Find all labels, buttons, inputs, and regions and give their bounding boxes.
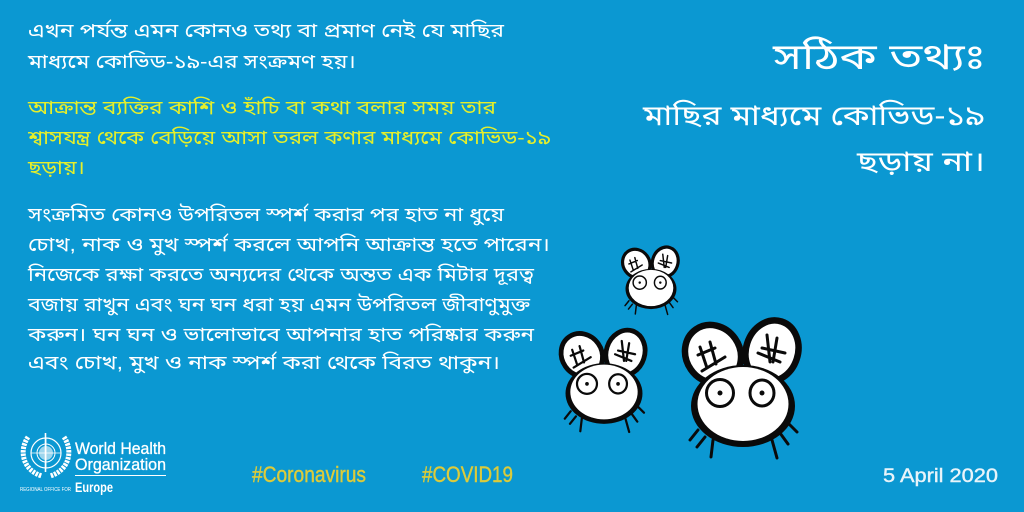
hashtag: COVID19: #COVID19 — [422, 462, 513, 487]
organization name: World Health — [75, 439, 166, 458]
text block: advice: চোখ, নাক ও মুখ স্পর্শ করলে আপনি আক্রান্ত হতে পারেন। — [28, 233, 550, 256]
date: 5 April 2020 — [883, 466, 998, 487]
title: correct fact: মাছির মাধ্যমে কোভিড-১৯ — [642, 99, 985, 131]
text block: advice: বজায় রাখুন এবং ঘন ঘন ধরা হয় এমন উপরিতল জীবাণুমুক্ত — [27, 293, 530, 316]
hashtag: Coronavirus: #Coronavirus — [252, 462, 366, 487]
text block: how it spreads (yellow) — [27, 96, 551, 179]
regional office: REGIONAL OFFICE FOR — [20, 487, 71, 493]
text block: advice: সংক্রমিত কোনও উপরিতল স্পর্শ করার পর হাত না ধুয়ে — [27, 203, 505, 226]
title: correct fact: সঠিক তথ্যঃ — [772, 36, 985, 77]
text block: no evidence of transmission: এখন পর্যন্ত এমন কোনও তথ্য বা প্রমাণ নেই যে মাছির — [28, 19, 505, 42]
text block: advice: এবং চোখ, মুখ ও নাক স্পর্শ করা থেকে বিরত থাকুন। — [28, 351, 500, 374]
text block: no evidence of transmission — [27, 19, 505, 73]
WHO logo: Organization — [75, 455, 166, 474]
icon: large fly — [674, 313, 806, 458]
icon: small fly — [617, 244, 682, 314]
text block: advice — [27, 203, 550, 374]
text block: advice: করুন। ঘন ঘন ও ভালোভাবে আপনার হাত পরিষ্কার করুন — [27, 323, 535, 346]
text block: how it spreads (yellow): আক্রান্ত ব্যক্তির কাশি ও হাঁচি বা কথা বলার সময় তার — [27, 96, 497, 119]
icon: WHO emblem — [23, 433, 69, 476]
text block: how it spreads (yellow): শ্বাসযন্ত্র থেকে বেড়িয়ে আসা তরল কণার মাধ্যমে কোভিড-১৯ — [27, 126, 551, 149]
WHO logo — [20, 433, 166, 495]
text block: how it spreads (yellow): ছড়ায়। — [27, 158, 85, 179]
WHO logo: Europe — [75, 479, 113, 495]
title: correct fact: ছড়ায় না। — [856, 146, 985, 177]
icon: medium fly — [553, 325, 651, 432]
text block: advice: নিজেকে রক্ষা করতে অন্যদের থেকে অন্তত এক মিটার দূরত্ব — [27, 263, 535, 286]
title: correct fact — [642, 36, 985, 177]
text block: no evidence of transmission: মাধ্যমে কোভিড-১৯-এর সংক্রমণ হয়। — [27, 50, 356, 73]
